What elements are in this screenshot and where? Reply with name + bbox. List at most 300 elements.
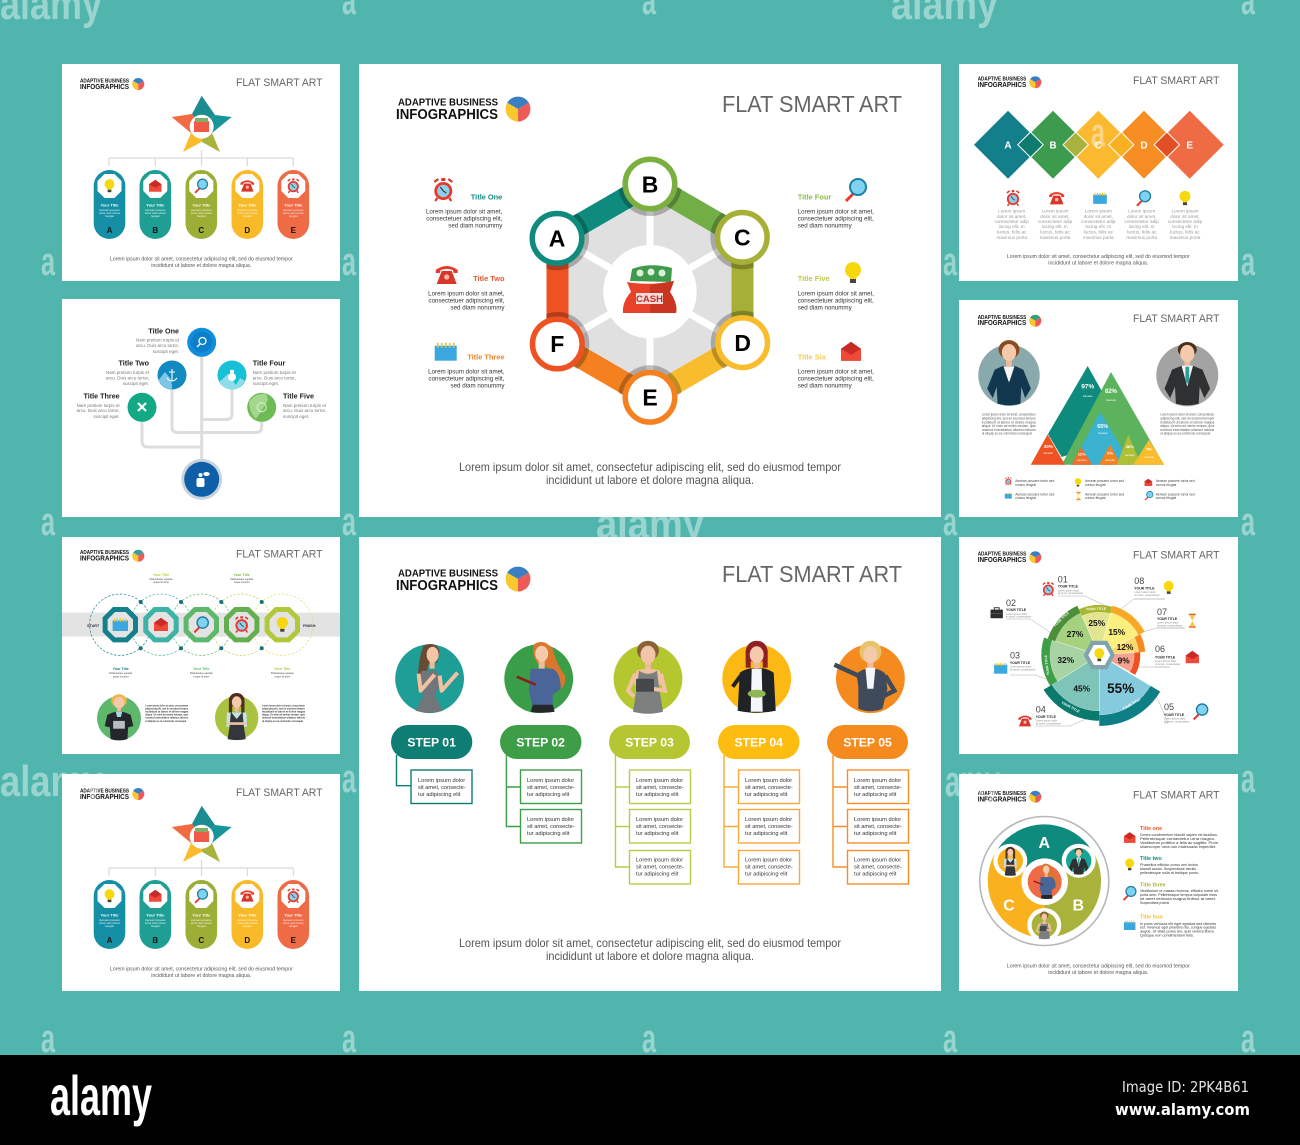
step captions: Your Title: [153, 573, 169, 577]
pill E: Aenean posuere: [283, 918, 304, 922]
node E: [625, 372, 675, 422]
item 02: YOUR TITLE: [1006, 608, 1027, 612]
label: title six: Title Six: [798, 352, 827, 362]
item 04: 04: [1036, 704, 1046, 714]
brand logo: [80, 78, 144, 91]
percent labels: 27%: [1067, 629, 1084, 639]
column D: consectetur adip: [1124, 219, 1159, 224]
label: title two: sed diam nonummy: [450, 304, 505, 312]
dashed circles: [90, 594, 313, 655]
brand logo: ADAPTIVE BUSINESS: [978, 77, 1027, 83]
step captions: neque sit amet: [274, 676, 290, 679]
legend: Aenean posuere tortor sed: [1085, 479, 1124, 483]
label: title four: Title Four: [798, 192, 831, 202]
label: title three: consectetuer adipiscing elit,: [428, 376, 505, 382]
legend: Aenean posuere tortor sed: [1015, 492, 1055, 496]
pill E: E: [291, 226, 297, 235]
brand logo: INFOGRAPHICS: [978, 82, 1026, 89]
avatar 4: [722, 641, 791, 713]
node: title four: suscipit eget.: [253, 381, 279, 386]
diamond B: B: [1049, 140, 1057, 152]
legend: cursus feugiat: [1156, 496, 1176, 500]
column A: Lorem ipsum: [998, 208, 1025, 214]
column A: maximus porta: [996, 235, 1027, 240]
list: title two: blandit auctor. Suspendisse iaculis: [1140, 867, 1196, 871]
step 05: sit amet, consecte-: [854, 785, 902, 791]
text right: Lorem ipsum dolor sit amet, consectetuer: [1160, 413, 1215, 417]
text block right: Lorem ipsum dolor sit amet, consectetuer: [262, 703, 306, 707]
node B: B: [642, 172, 658, 198]
triangle chart: Aenean: [1098, 431, 1108, 435]
watermarks: a: [342, 1017, 356, 1061]
item 03: sit amet, consectetuer: [1010, 668, 1036, 672]
pill D: D: [244, 226, 250, 235]
node: title four: arcu. Duis arcu tortor,: [253, 375, 296, 380]
triangle chart: 5%: [1146, 446, 1153, 452]
pill C: feugiat: [197, 924, 206, 928]
text left: incididunt ut labore et dolore magna: [982, 420, 1037, 424]
step 04: tur adipiscing elit: [745, 872, 788, 878]
brand logo: [978, 315, 1041, 327]
step captions: neque sit amet: [153, 581, 169, 584]
step 03: sit amet, consecte-: [636, 785, 684, 791]
pill E: [278, 170, 309, 239]
column C: luctus, felis ac: [1084, 230, 1114, 234]
item 02: sit amet, consectetuer: [1006, 615, 1032, 619]
pill B: B: [152, 226, 158, 235]
list: title three: Title three: [1140, 883, 1166, 889]
brand logo: INFOGRAPHICS: [978, 796, 1026, 803]
avatar 3: [614, 641, 682, 714]
node A: A: [549, 226, 565, 252]
node: title three: suscipit eget.: [93, 414, 120, 419]
money bag: CASH: [636, 294, 663, 305]
watermarks: a: [1091, 111, 1105, 155]
pill A: tortor sed cursus: [99, 211, 121, 215]
image id: Image ID: 2PK4B61: [1122, 1078, 1249, 1096]
pill B: tortor sed cursus: [145, 211, 166, 215]
footer text: [110, 256, 293, 269]
list: title four: augue. Ut vitae purus leo, quis viverra libero.: [1140, 930, 1215, 934]
legend: Aenean posuere tortor sed: [1156, 492, 1195, 496]
person: man: [1156, 342, 1218, 406]
node: title two: arcu. Duis arcu tortor,: [106, 375, 149, 380]
node: title one: Title One: [148, 326, 179, 336]
pill E: feugiat: [289, 214, 298, 218]
pill C: Your Title: [192, 202, 211, 208]
band labels: YOUR TITLE: [1044, 654, 1050, 675]
step 03: tur adipiscing elit: [636, 792, 679, 798]
list: title two: pellentesque nulla at tristique purus.: [1140, 871, 1199, 875]
step 05: sit amet, consecte-: [854, 824, 902, 830]
column D: Lorem ipsum: [1128, 208, 1155, 214]
pill D: [232, 880, 263, 949]
step 02: Lorem ipsum dolor: [527, 817, 574, 823]
step 01: Lorem ipsum dolor: [418, 778, 465, 784]
item 03: YOUR TITLE: [1010, 661, 1031, 665]
node A: [532, 214, 582, 263]
avatar 2: [504, 642, 573, 713]
octagon steps: [103, 607, 300, 642]
column E: dolor sit amet,: [1170, 214, 1200, 219]
triangle chart: Aenean: [1106, 398, 1116, 402]
pill E: tortor sed cursus: [283, 921, 304, 925]
column C: iscing elit. In: [1085, 224, 1112, 229]
footer text: [459, 460, 841, 487]
triangle chart: 65%: [1097, 424, 1108, 430]
node: title one: Nam pretium turpis et: [136, 338, 180, 342]
column E: maximus porta: [1170, 235, 1201, 240]
column B: iscing elit. In: [1042, 224, 1068, 229]
person: brunette woman: [215, 693, 258, 740]
label: title six: Lorem ipsum dolor sit amet,: [798, 368, 874, 376]
brand logo: [978, 791, 1041, 803]
item 01: YOUR TITLE: [1058, 584, 1079, 588]
item 07: sit amet, consectetuer: [1157, 624, 1183, 628]
watermarks: amy: [945, 757, 1000, 806]
node: title three: Title Three: [83, 391, 120, 400]
watermarks: a: [1241, 757, 1255, 801]
list: title one: Vestibulum porttitor a felis ac sagittis. Proin: [1140, 841, 1218, 845]
pill D: Aenean posuere: [237, 208, 258, 212]
triangle chart: 38%: [1126, 444, 1134, 449]
node: title four: Nam pretium turpis et: [253, 370, 296, 375]
list: title three: Suspendisse potenti.: [1140, 901, 1170, 905]
diamond A: [974, 111, 1042, 179]
pill B: feugiat: [151, 924, 160, 928]
tree connector lines: [142, 342, 262, 465]
watermarks: a: [342, 500, 356, 544]
label: title five: Title Five: [798, 274, 830, 283]
pill E: E: [291, 936, 297, 945]
pill E: Your Title: [284, 912, 303, 918]
brand logo: INFOGRAPHICS: [80, 794, 129, 801]
pill D: feugiat: [243, 924, 252, 928]
percent labels: 15%: [1108, 627, 1126, 637]
alamy logo: alamy: [50, 1064, 152, 1127]
item 01: Lorem ipsum dolor: [1058, 588, 1079, 592]
pill D: Your Title: [238, 912, 257, 918]
watermarks: a: [1241, 240, 1255, 284]
list: title four: In porta vehicula elit eget egestas sed ultricies: [1140, 922, 1216, 926]
item 08: Lorem ipsum dolor: [1134, 590, 1156, 594]
pill C: C: [198, 936, 204, 945]
label: title five: [798, 262, 874, 312]
hexagon spokes: [558, 184, 742, 397]
panel: five steps with people: [359, 537, 941, 991]
pill C: [186, 880, 217, 949]
step 04: tur adipiscing elit: [745, 831, 788, 837]
node: title four: [218, 359, 296, 390]
column A: consectetur adip: [994, 219, 1029, 224]
outer ring: [980, 816, 1109, 946]
finish label: FINISH: [303, 624, 316, 628]
step captions: Your Title: [234, 573, 250, 577]
footer text: [1007, 964, 1190, 976]
node: title four: Title Four: [253, 359, 286, 368]
percent labels: 9%: [1118, 655, 1130, 665]
text block right: ut aliquip ex ea commodo consequat: [262, 719, 303, 723]
step 03: Lorem ipsum dolor: [636, 817, 683, 823]
pill C: Aenean posuere: [191, 208, 212, 212]
node: title five: arcu. Duis arcu tortor,: [283, 408, 326, 413]
pill C: Your Title: [192, 912, 211, 918]
band labels: YOUR TITLE: [1061, 701, 1081, 714]
node: title three: arcu. Duis arcu tortor,: [77, 408, 120, 413]
step 01: sit amet, consecte-: [418, 785, 466, 791]
label: title two: Lorem ipsum dolor sit amet,: [428, 290, 505, 298]
label: title three: Lorem ipsum dolor sit amet,: [428, 368, 505, 376]
text right: nostrud exercitation ullamco laboris: [1160, 428, 1214, 432]
step 04: sit amet, consecte-: [745, 824, 793, 830]
radial wedges: [1050, 612, 1151, 715]
column A: luctus, felis ac: [997, 230, 1027, 234]
node: title one: [136, 326, 216, 357]
text block right: nostrud exercitation ullamco laboris: [262, 716, 305, 720]
pill B: Aenean posuere: [145, 208, 166, 212]
step captions: neque sit amet: [234, 581, 250, 584]
text block left: Lorem ipsum dolor sit amet, consectetuer: [145, 703, 189, 707]
panel: star org chart copy: [62, 774, 340, 991]
item 01: 01: [1058, 574, 1068, 584]
item 02: [990, 598, 1032, 619]
item 04: [1018, 704, 1061, 726]
diamond D: D: [1140, 140, 1148, 152]
step 04: Lorem ipsum dolor: [745, 858, 792, 864]
node: title one: arcu. Duis arcu tortor,: [136, 343, 179, 348]
text block left: aliqua. Ut enim ad minim veniam, quis: [145, 713, 189, 717]
site url: www.alamy.com: [1115, 1100, 1250, 1119]
item 01: [1043, 574, 1083, 596]
pill B: Your Title: [146, 202, 165, 208]
panel: team circle: [959, 774, 1238, 991]
percent labels: 32%: [1057, 655, 1075, 665]
diamond D: [1110, 111, 1178, 179]
pill A: Aenean posuere: [99, 208, 120, 212]
label: title five: Lorem ipsum dolor sit amet,: [798, 290, 874, 298]
pill B: Your Title: [146, 912, 165, 918]
item 06: Lorem ipsum dolor: [1155, 659, 1177, 663]
pill A: feugiat: [105, 214, 114, 218]
person: woman: [978, 340, 1040, 406]
item 08: sit amet, consectetuer: [1134, 593, 1160, 597]
list: title four: Title four: [1140, 915, 1164, 921]
pill A: Your Title: [100, 912, 119, 918]
triangle chart: 12%: [1078, 452, 1086, 456]
percent labels: 45%: [1073, 684, 1091, 694]
heading: FLAT SMART ART: [236, 787, 323, 799]
column C: maximus porta: [1083, 235, 1114, 240]
text block left: adipiscing elit, sed do eiusmod tempor: [145, 706, 189, 710]
node D: [718, 318, 768, 368]
legend: Aenean posuere tortor sed: [1085, 492, 1124, 496]
diamond E: E: [1186, 140, 1193, 152]
item 04: Lorem ipsum dolor: [1036, 718, 1057, 722]
step 03: sit amet, consecte-: [636, 864, 684, 870]
panel: hexagon cash cycle: [359, 64, 941, 517]
watermarks: a: [1241, 500, 1255, 544]
step 03: [609, 725, 690, 884]
label: title six: [798, 342, 874, 390]
connector lines: [109, 150, 293, 166]
label: title five: consectetuer adipiscing elit,: [798, 298, 874, 304]
list: title three: Vestibulum ut massa rhoncus, efficitur lorem sit: [1140, 889, 1218, 893]
item 03: 03: [1010, 650, 1020, 660]
pill B: Aenean posuere: [145, 918, 166, 922]
money bag: [623, 265, 676, 313]
heading: FLAT SMART ART: [236, 77, 323, 89]
item 02: 02: [1006, 598, 1016, 608]
heading: FLAT SMART ART: [1133, 313, 1220, 325]
column C: consectetur adip: [1081, 219, 1116, 224]
brand logo: INFOGRAPHICS: [396, 578, 498, 594]
pill D: D: [244, 936, 250, 945]
watermarks: alamy: [596, 500, 705, 547]
column B: maximus porta: [1040, 235, 1071, 240]
heading: FLAT SMART ART: [1133, 75, 1220, 87]
step 03: Lorem ipsum dolor: [636, 858, 683, 864]
step captions: Pellentesque egestas: [190, 672, 214, 675]
step 05: Lorem ipsum dolor: [854, 778, 901, 784]
step 02: sit amet, consecte-: [527, 824, 575, 830]
label: title one: Title One: [471, 192, 502, 202]
node: title two: suscipit eget.: [123, 381, 149, 386]
percent labels: [1057, 618, 1134, 696]
text block left: incididunt ut labore et dolore magna: [145, 710, 189, 714]
label: title two: consectetuer adipiscing elit,: [428, 298, 505, 304]
step captions: Your Title: [274, 667, 290, 671]
step 04: Lorem ipsum dolor: [745, 817, 792, 823]
pill C: [186, 170, 217, 239]
node: title three: Nam pretium turpis et: [77, 403, 120, 408]
column E: Lorem ipsum: [1171, 208, 1199, 214]
watermarks: alamy: [0, 757, 103, 806]
list: title three: porta sem. Pellentesque tempus vulputate risus,: [1140, 893, 1218, 897]
label: title one: Lorem ipsum dolor sit amet,: [426, 208, 503, 216]
pill A: [94, 170, 125, 239]
item 07: 07: [1157, 607, 1167, 617]
step 01: tur adipiscing elit: [418, 792, 461, 798]
column B: dolor sit amet,: [1040, 214, 1070, 219]
list: title two: Title two: [1140, 856, 1162, 862]
label: title four: Lorem ipsum dolor sit amet,: [798, 208, 874, 216]
pill C: tortor sed cursus: [191, 211, 212, 215]
pill E: Your Title: [284, 202, 303, 208]
step 05: STEP 05: [843, 736, 892, 750]
footer text: Lorem ipsum dolor sit amet, consectetur adipiscing elit, sed do eiusmod tempor: [1007, 254, 1190, 260]
watermarks: a: [943, 1017, 957, 1061]
band labels: YOUR TITLE: [1122, 697, 1142, 711]
hexagon body: [558, 184, 742, 398]
text left: Lorem ipsum dolor sit amet, consectetuer: [982, 413, 1036, 417]
label: title four: consectetuer adipiscing elit,: [798, 216, 874, 222]
footer text: [110, 966, 293, 979]
node C: C: [734, 224, 751, 250]
pill D: feugiat: [243, 214, 252, 218]
node: root: [181, 459, 222, 500]
panel: radial chart: [959, 537, 1238, 754]
triangle chart: Aenean: [1144, 455, 1155, 459]
pill E: feugiat: [289, 924, 298, 928]
item 06: YOUR TITLE: [1155, 656, 1176, 660]
node: title five: Title Five: [283, 391, 314, 400]
team avatars: [993, 844, 1096, 942]
pill B: [140, 170, 171, 239]
band labels: YOUR TITLE: [1086, 607, 1107, 611]
footer text: incididunt ut labore et dolore magna aliqua.: [151, 973, 252, 979]
leader lines: [1006, 596, 1185, 726]
step 05: Lorem ipsum dolor: [854, 817, 901, 823]
pill A: [94, 880, 125, 949]
footer text: incididunt ut labore et dolore magna aliqua.: [546, 473, 754, 487]
item 04: sit amet, consectetuer: [1036, 721, 1061, 725]
step 02: sit amet, consecte-: [527, 785, 575, 791]
step 05: tur adipiscing elit: [854, 831, 897, 837]
three-part circle: C: [1003, 897, 1015, 914]
list: title four: est. Vivamus eget pharetra nisi, congue egestas: [1140, 926, 1216, 930]
step captions: Your Title: [113, 667, 129, 671]
footer text: Lorem ipsum dolor sit amet, consectetur adipiscing elit, sed do eiusmod tempor: [459, 460, 841, 474]
label: title one: consectetuer adipiscing elit,: [426, 216, 503, 222]
brand logo: ADAPTIVE BUSINESS: [80, 78, 129, 84]
text block left: [145, 703, 189, 723]
node: title two: Title Two: [119, 359, 150, 368]
item 05: Lorem ipsum dolor: [1164, 717, 1186, 721]
triangle chart: 97%: [1081, 384, 1094, 390]
footer text: Lorem ipsum dolor sit amet, consectetur adipiscing elit, sed do eiusmod tempor: [1007, 964, 1190, 970]
footer text: incididunt ut labore et dolore magna aliqua.: [546, 949, 754, 963]
node shadows: [546, 187, 754, 395]
node B: [625, 159, 675, 209]
footer text: Lorem ipsum dolor sit amet, consectetur adipiscing elit, sed do eiusmod tempor: [110, 966, 293, 972]
centre hexagon: [1084, 641, 1115, 669]
panel: tree diagram: [62, 299, 340, 517]
node E: E: [642, 384, 658, 410]
brand logo: [978, 76, 1041, 89]
step captions: [109, 573, 295, 679]
brand logo: [80, 788, 144, 801]
node F: [532, 319, 582, 369]
column A: dolor sit amet,: [997, 214, 1026, 219]
label: title three: sed diam nonummy: [450, 382, 505, 390]
star: [172, 96, 232, 152]
triangle chart: Aenean: [1083, 394, 1093, 398]
step 04: STEP 04: [734, 736, 783, 750]
column D: [1124, 191, 1159, 240]
diamond A: A: [1004, 140, 1012, 152]
column E: [1168, 191, 1203, 240]
legend: Aenean posuere tortor sed: [1156, 479, 1195, 483]
text block right: adipiscing elit, sed do eiusmod tempor: [262, 706, 306, 710]
panel: star org chart: [62, 64, 340, 281]
column E: luctus, felis ac: [1170, 230, 1200, 234]
footer text: incididunt ut labore et dolore magna aliqua.: [151, 263, 252, 269]
footer text: [459, 936, 841, 963]
band labels: [1044, 607, 1142, 714]
diamond B: [1019, 111, 1087, 179]
list: title two: Phasellus efficitur purus nec lectus: [1140, 863, 1198, 867]
watermarks: a: [342, 757, 356, 801]
heading: FLAT SMART ART: [236, 549, 323, 561]
column D: iscing elit. In: [1129, 224, 1155, 229]
text block left: ut aliquip ex ea commodo consequat: [145, 719, 186, 723]
item 08: 08: [1134, 576, 1144, 586]
heading: FLAT SMART ART: [722, 561, 902, 587]
pill E: tortor sed cursus: [283, 211, 304, 215]
footer text: Lorem ipsum dolor sit amet, consectetur adipiscing elit, sed do eiusmod tempor: [459, 936, 841, 950]
node: title two: Nam pretium turpis et: [106, 370, 150, 375]
watermarks: a: [342, 240, 356, 284]
